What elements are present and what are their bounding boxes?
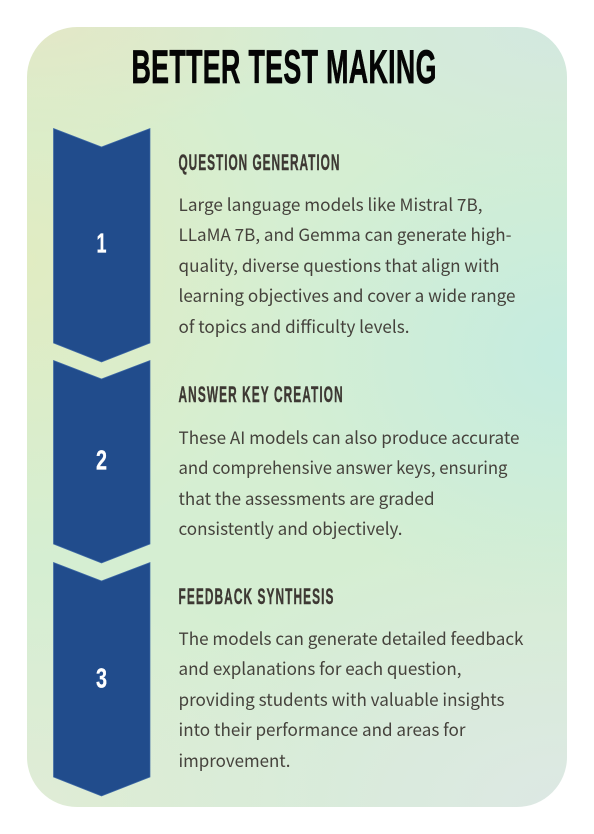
- step 2 number: 2: [96, 444, 107, 476]
- body text: question generation: LLaMA 7B, and Gemma can generate high-: [178, 221, 512, 246]
- title: BETTER TEST MAKING: [132, 41, 436, 94]
- step 3 chevron: [54, 562, 150, 796]
- step 1 chevron: [54, 128, 150, 362]
- body text: feedback synthesis: improvement.: [178, 747, 290, 772]
- body text: answer key creation: that the assessments are graded: [178, 485, 434, 510]
- section 2: answer key creation: [178, 382, 520, 540]
- body text: answer key creation: [178, 424, 520, 540]
- body text: answer key creation: consistently and objectively.: [178, 515, 402, 540]
- body text: feedback synthesis: into their performance and areas for: [178, 716, 466, 741]
- body text: question generation: Large language models like Mistral 7B,: [178, 191, 482, 216]
- body text: question generation: [178, 191, 516, 338]
- step 2 chevron: [54, 360, 150, 563]
- body text: feedback synthesis: and explanations for each question,: [178, 655, 462, 680]
- heading: feedback synthesis: FEEDBACK SYNTHESIS: [178, 584, 334, 609]
- body text: feedback synthesis: providing students with valuable insights: [178, 686, 505, 711]
- body text: question generation: learning objectives and cover a wide range: [178, 282, 516, 307]
- step 3 number: 3: [96, 662, 107, 694]
- body text: answer key creation: These AI models can also produce accurate: [178, 424, 520, 449]
- body text: question generation: quality, diverse questions that align with: [178, 252, 500, 277]
- step 1 number: 1: [96, 228, 106, 258]
- section 1: question generation: [178, 150, 516, 338]
- body text: answer key creation: and comprehensive answer keys, ensuring: [178, 454, 508, 479]
- body text: feedback synthesis: The models can generate detailed feedback: [178, 625, 524, 650]
- body text: feedback synthesis: [178, 625, 524, 772]
- heading: question generation: QUESTION GENERATION: [178, 150, 339, 175]
- heading: answer key creation: ANSWER KEY CREATION: [178, 382, 343, 407]
- body text: question generation: of topics and difficulty levels.: [178, 313, 410, 338]
- section 3: feedback synthesis: [178, 584, 524, 772]
